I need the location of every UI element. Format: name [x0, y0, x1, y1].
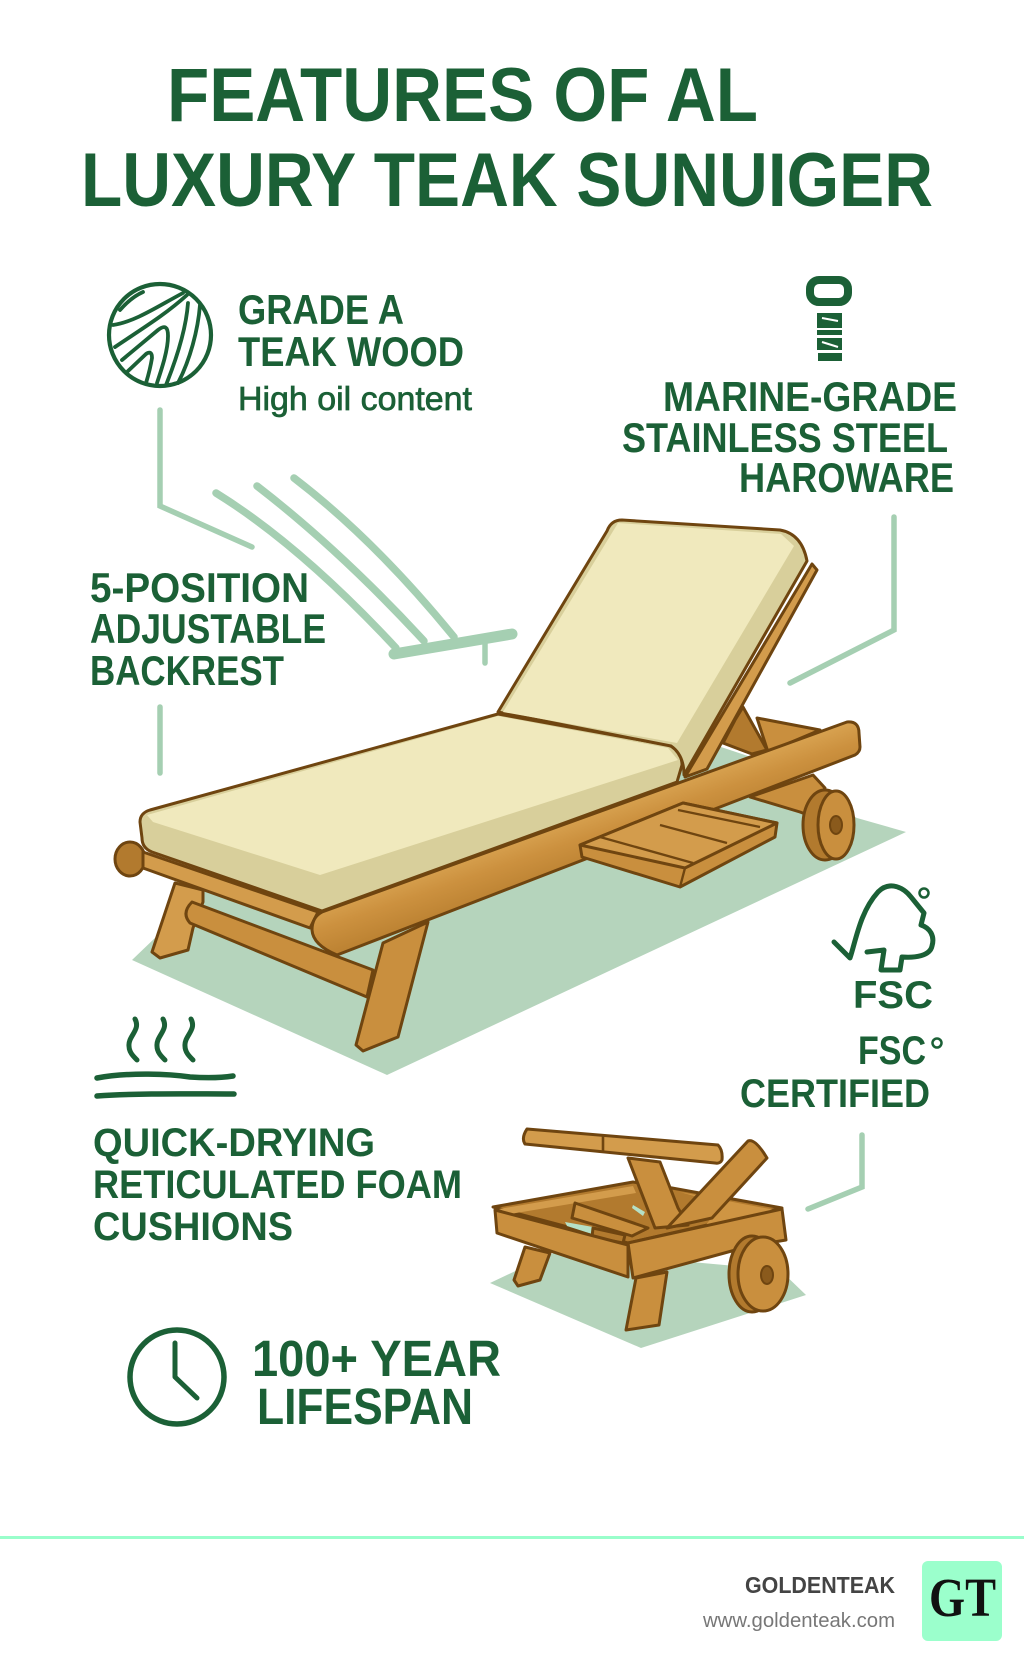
illustration: teak sun lounger — [115, 520, 906, 1075]
leader: backrest — [157, 707, 163, 773]
seat cushion — [140, 714, 682, 911]
feature: quick-drying cushions — [93, 1019, 462, 1249]
main side rail — [312, 722, 860, 955]
front-right face — [628, 1209, 786, 1278]
website: www.goldenteak.com — [702, 1609, 895, 1632]
feature: adjustable backrest label: ADJUSTABLE — [90, 605, 326, 652]
illustration: frame detail — [490, 1129, 806, 1348]
center support — [628, 1158, 688, 1228]
label: marine-grade: MARINE-GRADE — [663, 373, 957, 420]
feature: adjustable backrest label: BACKREST — [90, 647, 284, 694]
feature: adjustable backrest label — [90, 564, 326, 694]
front leg — [356, 922, 428, 1051]
rear wheel — [803, 790, 854, 860]
label: grade A: GRADE A — [238, 286, 404, 333]
label: teak wood: TEAK WOOD — [238, 328, 464, 375]
back-left leg — [152, 883, 203, 958]
backrest frame — [685, 564, 817, 777]
title: FEATURES OF AL — [167, 53, 758, 138]
ground shadow — [490, 1250, 806, 1348]
back-left leg — [514, 1247, 550, 1286]
icon: FSC tree logo — [834, 886, 933, 970]
label: stainless steel: STAINLESS STEEL — [622, 414, 948, 461]
footer rule — [0, 1536, 1024, 1539]
front-left face — [495, 1210, 628, 1277]
rear strut — [723, 707, 820, 754]
label: FSC: FSC — [858, 1029, 926, 1073]
ground shadow — [132, 745, 906, 1075]
label: certified: CERTIFIED — [740, 1072, 930, 1116]
stretcher — [186, 902, 373, 997]
inner slats — [565, 1203, 648, 1243]
label: 100+ year: 100+ YEAR — [252, 1330, 501, 1387]
label: reticulated foam: RETICULATED FOAM — [93, 1163, 462, 1207]
footer — [0, 1536, 1024, 1641]
rear brace — [750, 775, 825, 815]
feature: lifespan — [130, 1330, 501, 1435]
front leg — [626, 1272, 667, 1330]
feature: FSC certified — [740, 886, 942, 1116]
leader: backrest slats — [216, 478, 512, 663]
label: high oil content: High oil content — [238, 380, 472, 417]
feature: marine-grade hardware — [622, 280, 957, 501]
leader lines — [160, 410, 894, 1209]
label: lifespan: LIFESPAN — [257, 1378, 473, 1435]
backrest cushion — [498, 520, 807, 775]
leader: FSC — [808, 1135, 862, 1209]
leader: teak wood — [160, 410, 252, 547]
icon: clock — [130, 1330, 224, 1424]
label: quick-drying: QUICK-DRYING — [93, 1121, 375, 1165]
label: FSC logo wordmark: FSC — [853, 974, 933, 1017]
icon: wood grain circle — [109, 284, 211, 386]
side tray — [580, 803, 777, 887]
top board — [523, 1129, 722, 1163]
leader: hardware — [790, 517, 894, 683]
wheel — [729, 1236, 788, 1312]
title: LUXURY TEAK SUNUIGER — [81, 138, 933, 223]
icon: bolt — [810, 280, 848, 361]
logo badge: GT — [929, 1567, 996, 1628]
foot-end rail and roller — [115, 842, 318, 928]
icon: steam over foam — [97, 1019, 234, 1096]
frame top — [493, 1182, 782, 1243]
feature: adjustable backrest label: 5-POSITION — [90, 564, 309, 611]
label: haroware: HAROWARE — [739, 454, 954, 501]
diagonal arm — [667, 1141, 767, 1228]
logo badge — [922, 1561, 1002, 1641]
label: cushions: CUSHIONS — [93, 1205, 293, 1249]
brand name: GOLDENTEAK — [745, 1572, 895, 1598]
registered mark — [932, 1038, 942, 1048]
feature: grade A teak wood — [109, 284, 472, 417]
title — [81, 53, 933, 223]
